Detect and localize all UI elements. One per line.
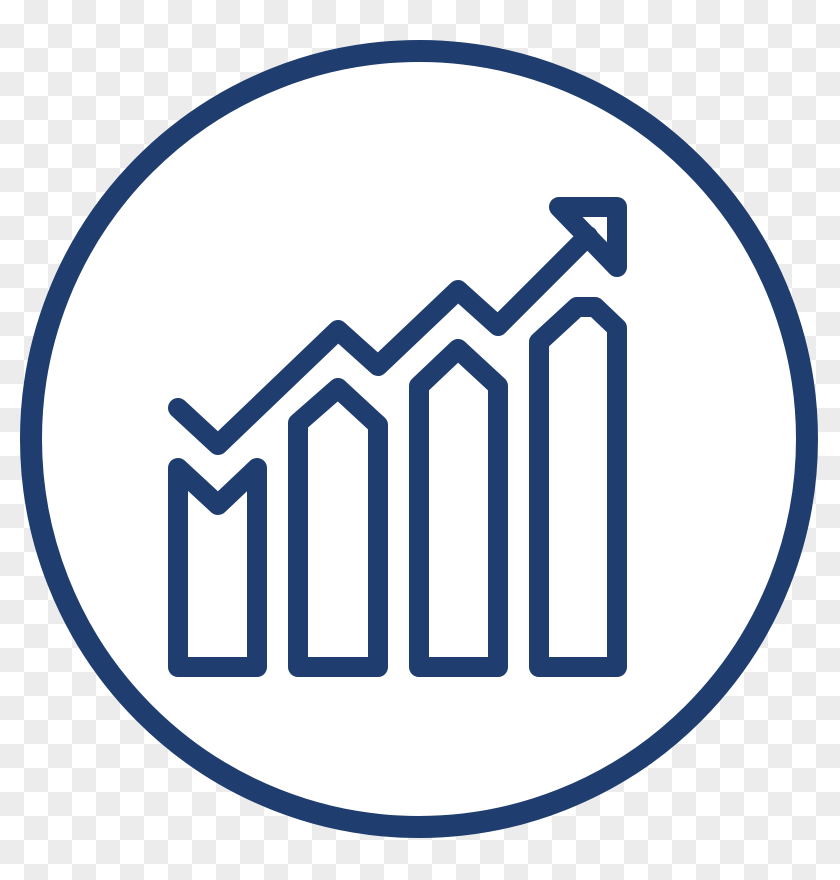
bar 3 — [419, 349, 498, 667]
arrow: trend line — [178, 207, 617, 445]
bar chart — [178, 307, 617, 667]
arrowhead — [559, 207, 617, 267]
bar 4 — [539, 307, 617, 667]
bar 2 — [298, 388, 378, 667]
bar 1 — [178, 468, 257, 667]
